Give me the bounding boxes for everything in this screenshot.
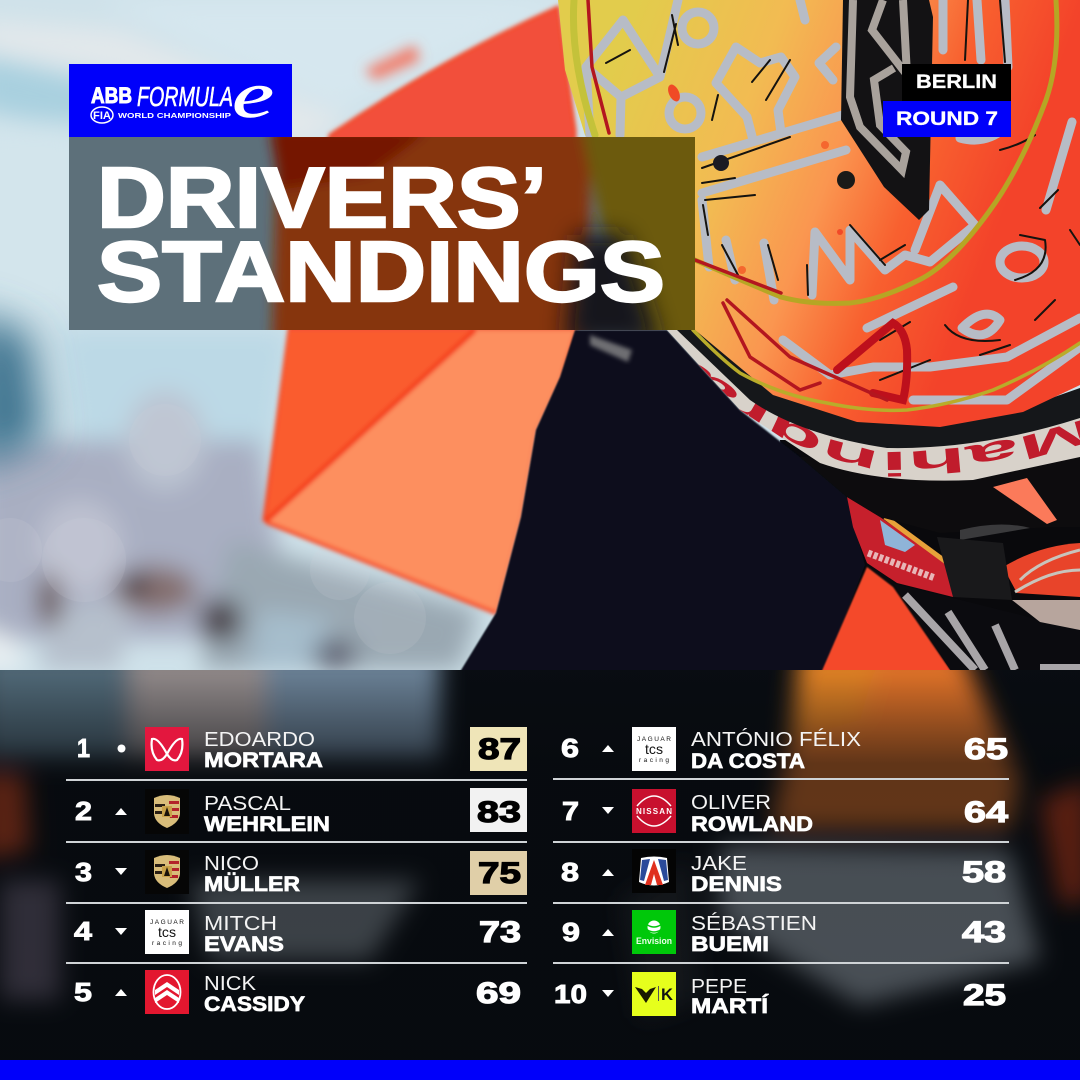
row 8: 8 [561,859,579,887]
row 1: MORTARA [204,748,323,772]
painted helmet shell [558,0,1080,427]
dark lower right backing [780,440,1080,680]
ABB wordmark: ABB [91,83,132,108]
carbon visor mount [841,0,933,220]
helmet black trim [677,330,1080,448]
row 2: PASCAL [204,793,291,815]
FIA badge [91,107,113,123]
row 4: 4 [74,918,93,946]
row 5: 69 [476,977,521,1010]
row 8: JAKE [691,853,747,875]
helmet visor band [667,330,1080,481]
chin strap [937,537,1012,600]
row 2: 83 [477,796,521,829]
dark jacket glow [565,235,660,345]
driver jacket [455,330,865,680]
helmet artwork [573,0,1080,410]
screws [713,155,729,171]
row 7: OLIVER [691,792,771,814]
bottom panel background [0,650,1080,1060]
orange under helmet [821,566,950,670]
blurred sky and crowd [0,20,487,670]
row 1 [77,727,527,772]
row 10: 25 [963,979,1006,1012]
row 7: ROWLAND [691,812,813,836]
blurred backdrop shapes [0,650,1080,1020]
script e: e [232,59,274,132]
row 9: 9 [562,919,580,947]
top panel title [69,137,695,330]
logo: Porsche [145,850,189,894]
logo: Nissan [632,789,676,833]
row 2: WEHRLEIN [204,812,330,836]
row 8: DENNIS [691,872,782,896]
row 6: 6 [561,735,579,763]
collar [847,497,953,597]
logo: Envision [632,910,676,954]
row 4: EVANS [204,932,284,956]
grey painted lines [586,0,1080,400]
world championship: WORLD CHAMPIONSHIP [118,111,231,120]
Formula E logo [69,59,292,137]
logo: Jaguar TCS Racing: JAGUAR [150,919,184,926]
row 6: 65 [964,733,1008,766]
logo: Cupra Kiro: K [661,985,674,1004]
logo: Jaguar TCS Racing: tcs [645,741,663,757]
row 7: 64 [964,796,1008,829]
FIA badge: FIA [93,110,111,122]
row 10: MARTÍ [691,993,769,1018]
row 3: 3 [75,859,92,887]
logo: Jaguar TCS Racing: racing [639,757,669,764]
harness bottom right [902,592,1080,670]
row 6 [561,727,1008,773]
gold ring [695,0,1057,303]
lower helmet [1003,543,1080,630]
row 3 [75,850,527,896]
row 9 [562,910,1006,956]
row 4 [74,910,521,956]
logo: Jaguar TCS Racing [145,910,189,954]
row 2 [75,788,527,836]
logo: Andretti [632,849,676,893]
row 9: SÉBASTIEN [691,912,817,935]
row 3: 75 [478,857,521,890]
row 2: 2 [75,798,92,826]
row 10: 10 [554,981,587,1009]
row 3: MÜLLER [204,871,300,896]
row 3: NICO [204,853,259,875]
logo: Jaguar TCS Racing: JAGUAR [637,736,671,743]
logo: Envision: Envision [636,936,672,946]
logo: Nissan: NISSAN [636,807,672,816]
row 5: CASSIDY [204,992,305,1016]
logo: Jaguar TCS Racing: tcs [158,924,176,940]
logo: Mahindra [145,727,189,771]
photo background [0,0,1080,670]
FORMULA wordmark: FORMULA [137,81,233,112]
row 7: 7 [562,798,579,826]
dark red paint strokes [837,323,907,400]
logo: Porsche [145,789,189,834]
helmet band and chin [847,478,1057,600]
logo: Jaguar TCS Racing [632,727,676,771]
row 5: NICK [204,973,257,995]
bottom blue bar [0,1060,1080,1080]
dark outlines [606,0,1080,380]
umbrella [264,7,575,613]
standings right column [553,727,1009,1018]
jacket logo [590,335,632,362]
row 10 [554,972,1006,1018]
row 5 [74,970,521,1016]
row 8 [561,849,1006,896]
location: BERLIN [916,72,997,93]
red flecks [668,84,680,102]
row 7 [562,789,1008,836]
standings left column [66,727,527,1016]
logo: Jaguar TCS Racing: racing [152,940,182,947]
row 4: 73 [479,916,521,949]
title text: DRIVERS’ [97,151,547,246]
race tag [883,64,1011,137]
row 4: MITCH [204,913,277,935]
blurred title backdrop [69,137,695,330]
top panel title: STANDINGS [97,225,665,320]
row 8: 58 [962,856,1006,889]
bokeh circles [48,574,366,644]
row 1: EDOARDO [204,729,315,751]
row 9: 43 [962,916,1006,949]
row 1: 1 [77,735,90,763]
row 6: ANTÓNIO FÉLIX [691,728,861,751]
dark blue shadow at left edge [0,310,45,470]
logo: Citroen [145,970,189,1014]
row 1: 87 [478,733,521,766]
row 5: 5 [74,979,92,1007]
logo: Cupra Kiro [632,972,676,1016]
row 9: BUEMI [691,932,769,956]
row 6: DA COSTA [691,749,805,773]
row 10: PEPE [691,976,747,998]
round: ROUND 7 [896,109,998,130]
